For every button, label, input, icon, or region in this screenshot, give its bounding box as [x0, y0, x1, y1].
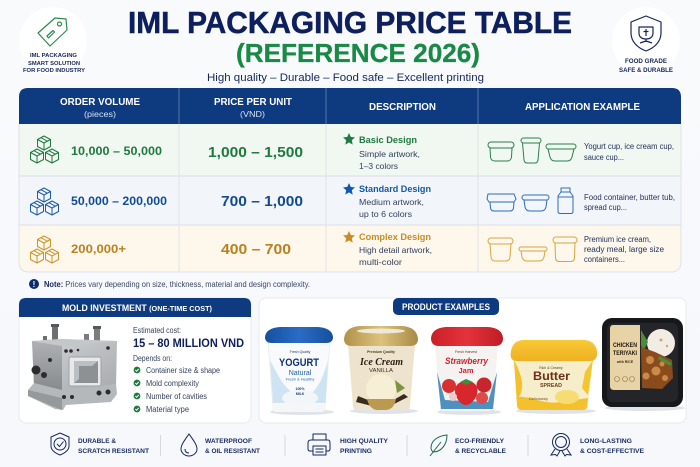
application text — [584, 193, 675, 212]
subtitle: (REFERENCE 2026) — [236, 38, 480, 68]
feature: printing — [308, 434, 389, 455]
application text: ready meal, large size — [584, 245, 664, 254]
feature text: HIGH QUALITY — [340, 438, 389, 445]
application text — [584, 142, 674, 162]
product: chicken teriyaki tray: with RICE — [616, 360, 634, 364]
icons: amber containers — [488, 237, 577, 262]
product: yogurt — [265, 327, 333, 412]
order volume: 200,000+ — [71, 242, 126, 256]
checklist: Number of cavities — [146, 392, 207, 401]
description: multi-color — [359, 257, 402, 267]
product: chicken teriyaki tray: CHICKEN — [613, 343, 637, 349]
icons: blue containers — [487, 188, 573, 214]
badge heading: PRODUCT EXAMPLES — [402, 302, 490, 312]
description: up to 6 colors — [359, 209, 412, 219]
icon: shield — [631, 16, 661, 51]
icon: shield check — [51, 433, 69, 455]
row: standard — [30, 183, 675, 219]
note: Note: Prices vary depending on size, thickness, material and design complexity. — [44, 280, 310, 289]
feature text — [455, 438, 507, 455]
table header: (VND) — [240, 109, 265, 119]
badge: IML packaging — [19, 7, 87, 75]
order volume: 10,000 – 50,000 — [71, 144, 162, 158]
feature text: & COST-EFFECTIVE — [580, 448, 645, 455]
icon: boxes blue — [30, 188, 58, 215]
row: complex — [30, 231, 664, 267]
badge caption: FOR FOOD INDUSTRY — [23, 68, 85, 74]
product: strawberry jam: Strawberry — [445, 356, 489, 367]
description — [343, 231, 432, 267]
icon: water drop — [181, 434, 197, 456]
product: butter: Rich & Creamy — [539, 366, 563, 370]
icon: ribbon award — [551, 434, 571, 456]
note: ! — [33, 280, 35, 289]
price: 700 – 1,000 — [221, 193, 303, 210]
badge caption — [619, 59, 673, 74]
product: yogurt: Fresh & Healthy — [286, 376, 314, 382]
cost text: Depends on: — [133, 354, 172, 363]
description: Medium artwork, — [359, 197, 424, 207]
feature text: LONG-LASTING — [580, 438, 632, 445]
feature text: PRINTING — [340, 448, 372, 455]
application text: Premium ice cream, — [584, 235, 651, 244]
product: yogurt: Natural — [289, 370, 312, 377]
badge caption: IML PACKAGING — [30, 53, 77, 59]
row: basic — [30, 133, 674, 171]
feature: long-lasting — [551, 434, 645, 456]
feature text — [340, 438, 389, 455]
description — [343, 183, 431, 219]
product: butter: Butter — [533, 369, 570, 383]
application text: sauce cup... — [584, 153, 624, 162]
feature: waterproof — [181, 434, 260, 456]
badge: food grade — [612, 7, 680, 75]
tagline: High quality – Durable – Food safe – Excellent printing — [207, 72, 484, 84]
icon: boxes amber — [30, 236, 58, 263]
application text: containers... — [584, 255, 625, 264]
feature text: & RECYCLABLE — [455, 448, 507, 455]
product shadows — [270, 405, 685, 415]
product: butter: SPREAD — [540, 383, 562, 389]
badge heading — [393, 298, 499, 315]
description: Complex Design — [359, 232, 431, 243]
icon: boxes green — [30, 136, 58, 163]
table header: ORDER VOLUME — [60, 97, 140, 108]
checklist — [134, 366, 220, 414]
product: butter — [511, 340, 597, 410]
description: Basic Design — [359, 135, 417, 146]
checklist: Mold complexity — [146, 379, 199, 388]
panel header — [19, 298, 251, 317]
product: chicken teriyaki tray — [602, 318, 683, 407]
icon: printer — [308, 434, 330, 455]
product: yogurt: YOGURT — [279, 357, 319, 369]
feature text — [205, 438, 260, 455]
icon: price tag — [38, 18, 67, 46]
product: ice cream: Premium Quality — [367, 350, 395, 354]
feature text: WATERPROOF — [205, 438, 252, 445]
panel: mold investment — [19, 298, 251, 423]
product: ice cream: Ice Cream — [359, 356, 403, 368]
badge caption: SAFE & DURABLE — [619, 68, 673, 74]
panel: product examples — [259, 298, 686, 423]
product: yogurt: MILK — [296, 392, 305, 396]
product: butter: Deliciously — [529, 396, 548, 401]
badge caption: SMART SOLUTION — [28, 61, 80, 67]
table header — [19, 88, 681, 124]
product: strawberry jam: Fresh Harvest — [455, 350, 477, 354]
cost text — [133, 326, 244, 363]
badge caption: FOOD GRADE — [625, 59, 667, 65]
description: 1–3 colors — [359, 161, 398, 171]
table header: DESCRIPTION — [369, 102, 436, 113]
table header: APPLICATION EXAMPLE — [525, 102, 640, 113]
product: ice cream: VANILLA — [369, 368, 394, 374]
product: strawberry jam: Jam — [458, 366, 474, 375]
cost text: 15 – 80 MILLION VND — [133, 336, 244, 350]
application text: spread cup... — [584, 203, 627, 212]
feature text: SCRATCH RESISTANT — [78, 448, 149, 455]
checklist: Material type — [146, 405, 189, 414]
application text — [584, 235, 664, 264]
title: IML PACKAGING PRICE TABLE — [128, 6, 572, 40]
cost text: Estimated cost: — [133, 326, 181, 335]
feature text: & OIL RESISTANT — [205, 448, 260, 455]
product: ice cream — [344, 326, 418, 410]
feature text — [78, 438, 149, 455]
feature text — [580, 438, 645, 455]
checklist: Container size & shape — [146, 366, 220, 375]
description: Standard Design — [359, 184, 431, 195]
panel header: MOLD INVESTMENT (ONE-TIME COST) — [62, 303, 212, 313]
application text: Food container, butter tub, — [584, 193, 675, 202]
order volume: 50,000 – 200,000 — [71, 194, 167, 208]
description — [343, 133, 420, 171]
image: mold — [28, 324, 117, 410]
price: 400 – 700 — [221, 241, 291, 258]
product: yogurt: 100% — [296, 387, 305, 391]
table header: (pieces) — [84, 109, 116, 119]
product: yogurt: Fresh Quality — [290, 350, 311, 354]
table header: PRICE PER UNIT — [214, 97, 292, 108]
feature: durable — [51, 433, 149, 455]
icons: green containers — [488, 138, 576, 163]
badge caption — [23, 53, 85, 74]
icon: leaf — [430, 435, 447, 456]
row backgrounds — [19, 124, 681, 272]
application text: Yogurt cup, ice cream cup, — [584, 142, 674, 151]
product: chicken teriyaki tray: TERIYAKI — [613, 351, 637, 357]
panel: price table — [19, 88, 681, 272]
description: High detail artwork, — [359, 245, 432, 255]
price: 1,000 – 1,500 — [208, 144, 303, 161]
product: strawberry jam — [431, 327, 503, 411]
feature: eco-friendly — [430, 435, 507, 456]
description: Simple artwork, — [359, 149, 420, 159]
feature text: ECO-FRIENDLY — [455, 438, 505, 445]
feature text: DURABLE & — [78, 438, 116, 445]
